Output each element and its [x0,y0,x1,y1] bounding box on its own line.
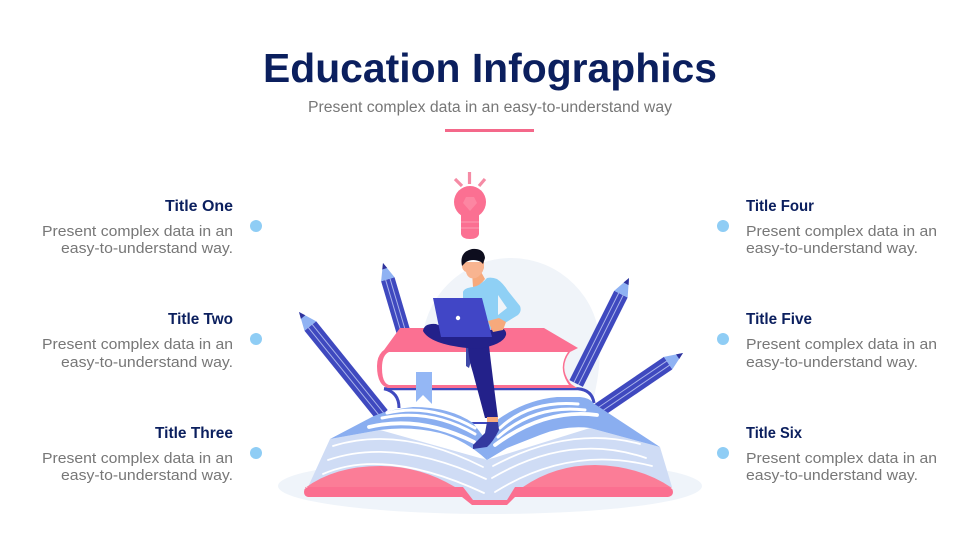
backdrop semicircle [422,258,600,405]
shoe [473,422,499,449]
text block: title four: Title Four [746,198,814,215]
lower closed book [384,389,600,430]
subtitle: Present complex data in an easy-to-understand way [308,99,672,116]
marker dot five [717,333,729,345]
neck [472,270,485,287]
text block: title five: easy-to-understand way. [746,354,918,371]
bookmark [416,372,432,404]
text block: title one: Title One [165,198,233,215]
head [462,262,484,278]
marker dot one [250,220,262,232]
pink book cover [304,487,673,505]
shirt [463,278,521,335]
hand [488,318,506,332]
text block: title four: Present complex data in an [746,223,937,240]
title: Education Infographics [263,45,717,91]
tucked foot [466,344,472,368]
hair [461,249,485,266]
text block: title three [42,425,233,484]
trouser leg [468,343,498,418]
text block: title six: Present complex data in an [746,450,937,467]
text block: title six [746,425,937,484]
marker dot six [717,447,729,459]
left page lines [323,410,486,493]
right top page [487,397,660,460]
text block: title three: Present complex data in an [42,450,233,467]
central illustration [278,172,702,514]
laptop logo [456,316,460,320]
pink inner arches [305,466,455,488]
pencil left near [376,261,414,348]
person [423,249,521,449]
sock [487,417,498,422]
light page block [308,428,672,501]
text block: title five [746,311,937,371]
text block: title four [746,198,937,257]
left top page [330,407,490,460]
arm gap [498,295,507,315]
text block: title six: Title Six [746,425,802,442]
ground shadow [278,458,702,514]
crossed legs [423,324,506,349]
text block: title one [42,198,233,257]
pencil right far [593,347,687,418]
pencil right near [569,275,636,387]
text block: title two: Present complex data in an [42,336,233,353]
text block: title two: Title Two [168,311,233,328]
text block: title six: easy-to-understand way. [746,467,918,484]
text block: title four: easy-to-understand way. [746,240,918,257]
open book [304,397,673,505]
text block: title five: Present complex data in an [746,336,937,353]
marker dot two [250,333,262,345]
right page lines [492,404,652,492]
text block: title five: Title Five [746,311,812,328]
pencil left far [293,307,388,419]
icon: light bulb [454,172,486,239]
text block: title one: Present complex data in an [42,223,233,240]
text block: title two: easy-to-understand way. [61,354,233,371]
laptop [433,298,492,337]
upper closed book [377,328,578,388]
text block: title three: Title Three [155,425,233,442]
title underline [445,129,534,132]
text block: title three: easy-to-understand way. [61,467,233,484]
marker dot four [717,220,729,232]
marker dot three [250,447,262,459]
text block: title two [42,311,233,371]
text block: title one: easy-to-understand way. [61,240,233,257]
